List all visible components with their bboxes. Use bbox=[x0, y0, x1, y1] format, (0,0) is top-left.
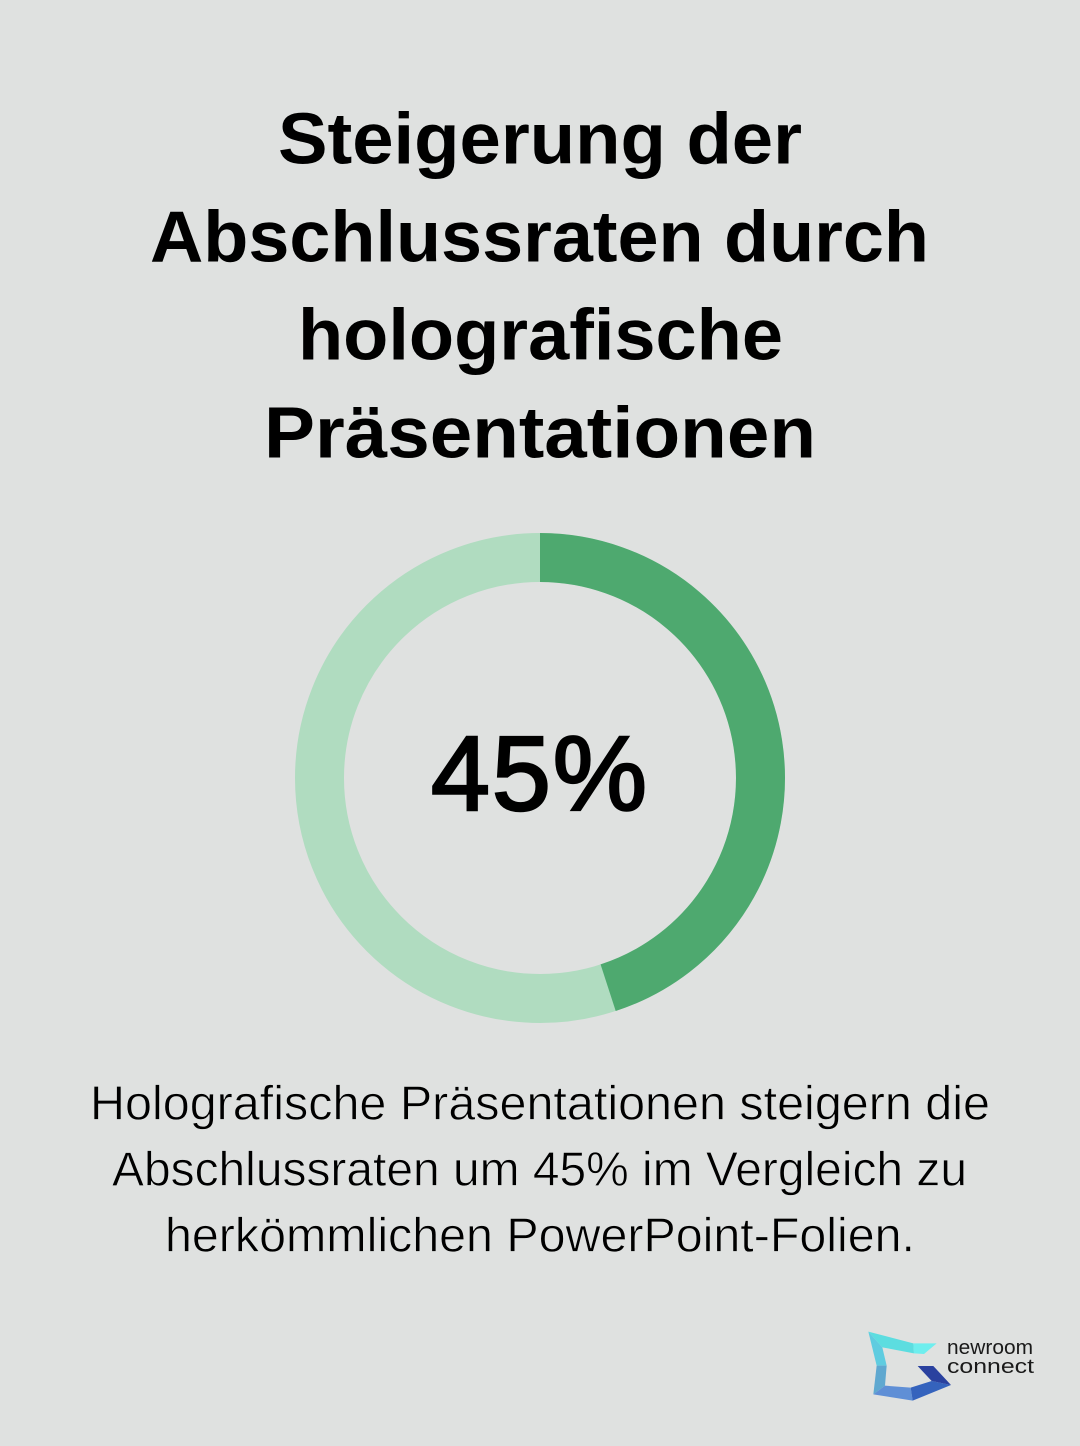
description text bbox=[90, 1078, 990, 1262]
description text: Holografische Präsentationen steigern die bbox=[90, 1078, 990, 1130]
title bbox=[150, 100, 929, 474]
logo wordmark: connect bbox=[947, 1356, 1035, 1378]
logo: newroom connect bbox=[868, 1332, 1035, 1401]
description text: herkömmlichen PowerPoint-Folien. bbox=[165, 1210, 915, 1262]
description text: Abschlussraten um 45% im Vergleich zu bbox=[112, 1144, 967, 1196]
donut value: 45% bbox=[431, 715, 647, 833]
title: Steigerung der bbox=[278, 100, 802, 180]
icon: logo mark bbox=[868, 1332, 951, 1401]
logo wordmark: newroom bbox=[947, 1337, 1033, 1359]
title: holografische bbox=[298, 296, 783, 376]
title: Präsentationen bbox=[264, 394, 816, 474]
title: Abschlussraten durch bbox=[150, 198, 929, 278]
donut chart: 45% bbox=[320, 558, 760, 998]
logo wordmark bbox=[947, 1337, 1035, 1378]
